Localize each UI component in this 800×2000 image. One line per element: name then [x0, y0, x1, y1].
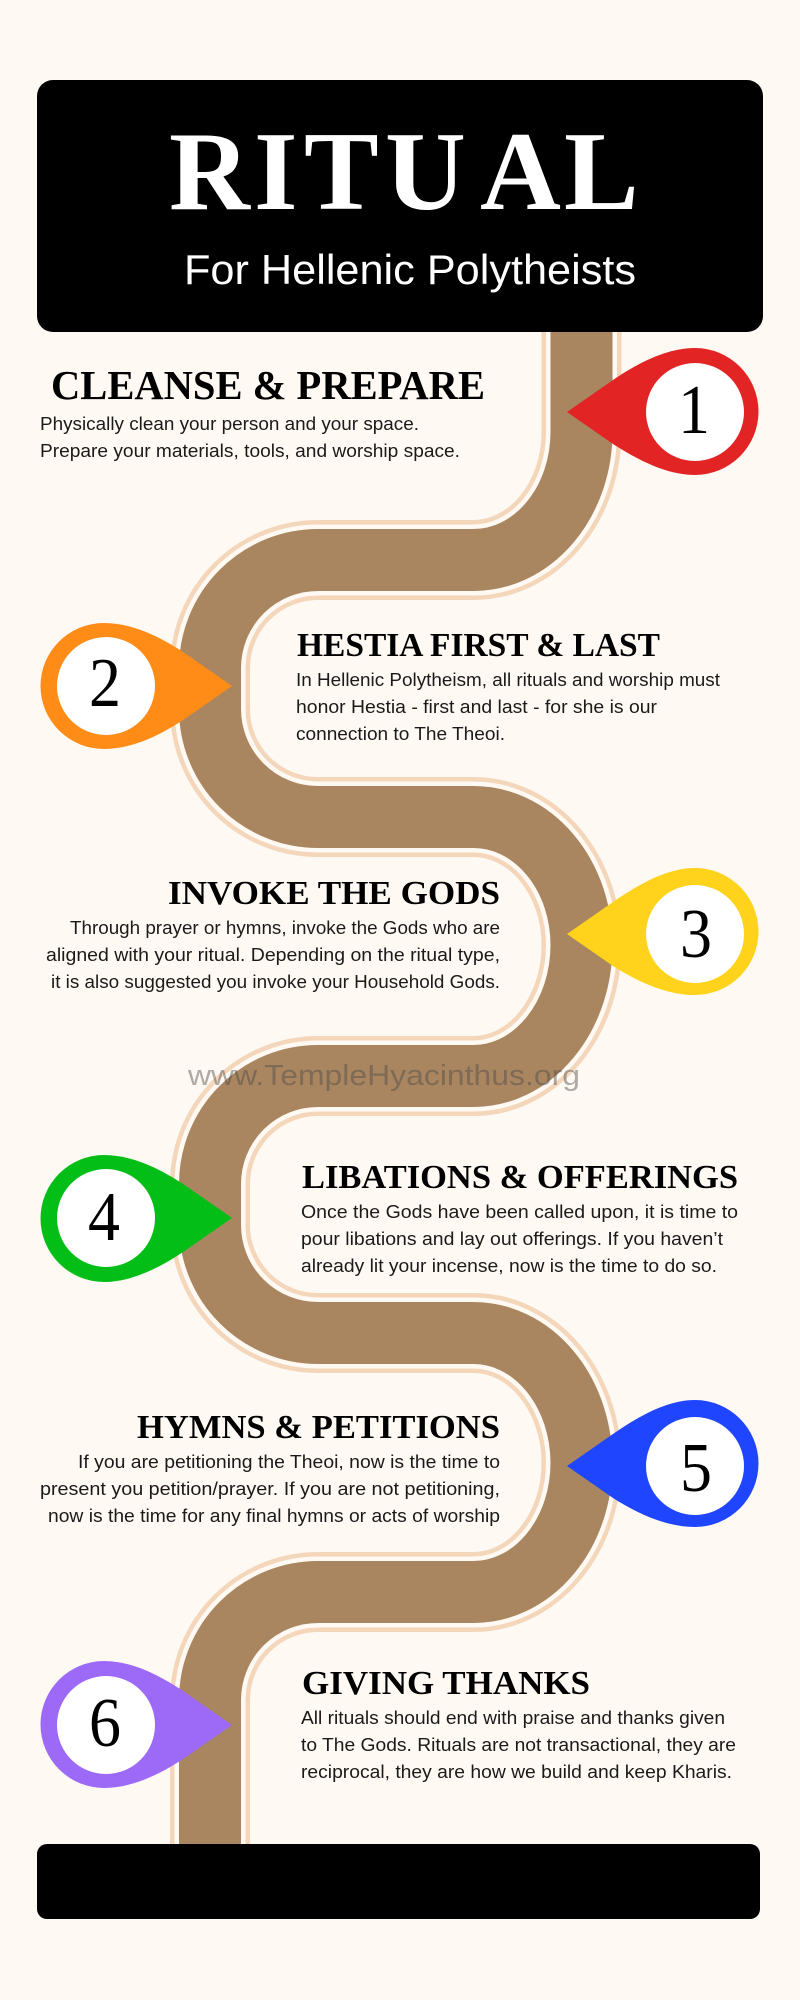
step 4 text: already lit your incense, now is the time to do so.	[301, 1256, 717, 1276]
title: RITUAL	[169, 110, 639, 234]
step 1 pin	[567, 348, 758, 475]
step 1 text: Physically clean your person and your space.	[40, 414, 419, 434]
step 4 text: Once the Gods have been called upon, it is time to	[301, 1202, 738, 1222]
step 5 text	[40, 1409, 500, 1526]
step 5 text: now is the time for any final hymns or acts of worship	[48, 1506, 500, 1526]
winding road	[210, 300, 582, 1860]
step 4 text: pour libations and lay out offerings. If you haven’t	[301, 1229, 723, 1249]
step 6 text: reciprocal, they are how we build and keep Kharis.	[301, 1762, 732, 1782]
step 5 text: If you are petitioning the Theoi, now is the time to	[78, 1452, 500, 1472]
step 2 pin	[40, 623, 232, 749]
step 1 text: CLEANSE & PREPARE	[51, 362, 485, 408]
step 3 pin: 3	[680, 896, 712, 973]
watermark: www.TempleHyacinthus.org	[187, 1060, 580, 1092]
step 3 pin	[567, 868, 758, 995]
step 4 text: LIBATIONS & OFFERINGS	[302, 1159, 738, 1196]
subtitle: For Hellenic Polytheists	[184, 246, 636, 293]
step 6 text	[301, 1665, 736, 1782]
step 3 text: aligned with your ritual. Depending on the ritual type,	[46, 945, 500, 965]
step 3 text: it is also suggested you invoke your Household Gods.	[51, 972, 500, 992]
step 3 text: INVOKE THE GODS	[168, 875, 500, 912]
step 6 pin	[40, 1661, 232, 1788]
step 2 text: honor Hestia - first and last - for she is our	[296, 697, 657, 717]
step 1 pin: 1	[678, 372, 710, 449]
step 3 text	[46, 875, 500, 992]
step 2 text	[296, 627, 720, 744]
step 6 text: to The Gods. Rituals are not transactional, they are	[301, 1735, 736, 1755]
step 6 text: GIVING THANKS	[302, 1665, 590, 1702]
step 2 text: HESTIA FIRST & LAST	[297, 627, 660, 664]
step 5 text: present you petition/prayer. If you are not petitioning,	[40, 1479, 500, 1499]
step 2 pin: 2	[89, 645, 121, 722]
footer bar	[37, 1844, 760, 1919]
step 1 text: Prepare your materials, tools, and worship space.	[40, 441, 460, 461]
step 2 text: connection to The Theoi.	[296, 724, 505, 744]
step 6 pin: 6	[89, 1685, 121, 1762]
header panel	[37, 80, 763, 332]
step 5 text: HYMNS & PETITIONS	[137, 1409, 500, 1446]
step 4 pin: 4	[88, 1179, 120, 1256]
step 6 text: All rituals should end with praise and thanks given	[301, 1708, 725, 1728]
step 5 pin	[567, 1400, 758, 1527]
step 4 pin	[40, 1155, 232, 1282]
step 3 text: Through prayer or hymns, invoke the Gods who are	[70, 918, 500, 938]
step 1 text	[40, 362, 485, 461]
step 2 text: In Hellenic Polytheism, all rituals and worship must	[296, 670, 720, 690]
step 4 text	[301, 1159, 738, 1276]
step 5 pin: 5	[680, 1430, 712, 1507]
